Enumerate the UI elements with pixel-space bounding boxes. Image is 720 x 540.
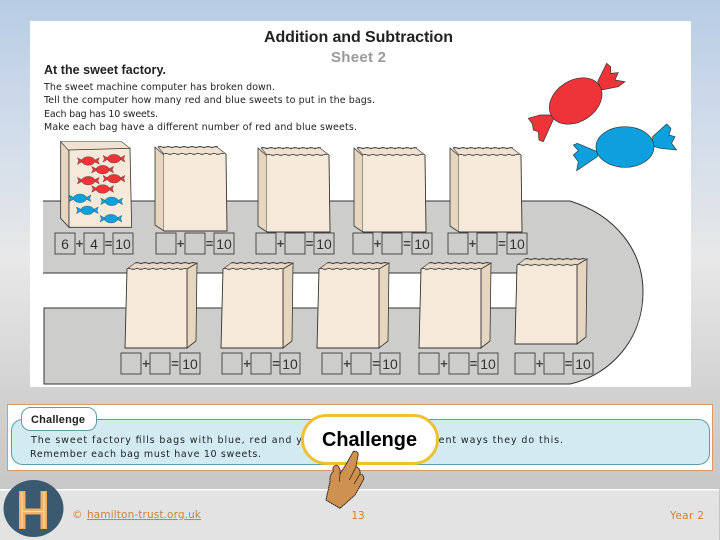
equation 4: = bbox=[403, 236, 411, 251]
equation 7: + bbox=[243, 356, 251, 371]
instructions text: The sweet machine computer has broken down. bbox=[43, 82, 275, 93]
challenge text: Remember each bag must have 10 sweets. bbox=[30, 449, 261, 460]
challenge text bbox=[30, 435, 563, 460]
equation: 6 + 4 = 10: 10 bbox=[115, 236, 131, 252]
equation 6: = bbox=[171, 356, 179, 371]
paper bag 4 bbox=[354, 147, 426, 232]
bag with example sweets bbox=[61, 142, 132, 227]
callout: challenge bubble: Challenge bbox=[322, 428, 417, 451]
equation 5: 10 bbox=[509, 236, 525, 252]
equation: 6 + 4 = 10 bbox=[55, 233, 133, 254]
instructions text: Make each bag have a different number of red and blue sweets. bbox=[44, 122, 357, 133]
page number: 13 bbox=[351, 510, 365, 522]
footer copyright link: © bbox=[72, 509, 82, 521]
paper bag 2 bbox=[155, 146, 227, 231]
equation 2: 10 bbox=[216, 236, 232, 252]
equation 5 bbox=[448, 233, 527, 254]
instructions text: Tell the computer how many red and blue sweets to put in the bags. bbox=[43, 95, 375, 106]
equation 3: 10 bbox=[316, 236, 332, 252]
equation 10: + bbox=[536, 356, 544, 371]
equation 4: + bbox=[374, 236, 382, 251]
equation 7 bbox=[222, 353, 300, 374]
subtitle: Sheet 2 bbox=[331, 49, 386, 66]
challenge text: The sweet factory fills bags with blue, red and yellow sweets. Find different ways they do this. bbox=[30, 435, 563, 446]
equation 9 bbox=[419, 353, 498, 374]
challenge text box bbox=[12, 420, 710, 464]
equation 7: 10 bbox=[282, 356, 298, 372]
equation 10 bbox=[515, 353, 593, 374]
equation 4 bbox=[353, 233, 432, 254]
paper bag 9 bbox=[419, 262, 491, 348]
equation 9: = bbox=[470, 356, 478, 371]
year label: Year 2 bbox=[669, 510, 704, 522]
heading: at the sweet factory: At the sweet factory. bbox=[44, 63, 166, 77]
paper bag 5 bbox=[450, 147, 522, 232]
challenge tab bbox=[22, 408, 96, 430]
equation 8: + bbox=[343, 356, 351, 371]
equation 3: = bbox=[306, 236, 314, 251]
equation 2: = bbox=[206, 236, 214, 251]
paper bag 10 bbox=[515, 258, 587, 344]
equation 8: = bbox=[372, 356, 380, 371]
equation 2: + bbox=[177, 236, 185, 251]
paper bag 3 bbox=[258, 147, 330, 232]
equation 3 bbox=[256, 233, 334, 254]
icon: Hamilton Trust logo bbox=[4, 480, 64, 537]
equation 6 bbox=[121, 353, 200, 374]
equation 10: = bbox=[565, 356, 573, 371]
conveyor belt bbox=[43, 201, 643, 384]
icon: large blue sweet bbox=[573, 124, 677, 171]
equation 4: 10 bbox=[414, 236, 430, 252]
instructions text: Each bag has 10 sweets. bbox=[44, 109, 158, 120]
equation 6: + bbox=[142, 356, 150, 371]
equation 7: = bbox=[272, 356, 280, 371]
panel: worksheet bbox=[30, 21, 691, 387]
equation: 6 + 4 = 10: + bbox=[76, 236, 84, 251]
equation 6: 10 bbox=[182, 356, 198, 372]
footer bar bbox=[0, 489, 719, 540]
equation 5: = bbox=[498, 236, 506, 251]
equation: 6 + 4 = 10: 4 bbox=[90, 236, 98, 252]
footer copyright link: hamilton-trust.org.uk bbox=[87, 509, 202, 521]
equation 9: + bbox=[440, 356, 448, 371]
equation 2 bbox=[156, 233, 234, 254]
equation 3: + bbox=[277, 236, 285, 251]
instructions text bbox=[43, 82, 375, 133]
challenge tab: Challenge bbox=[31, 414, 85, 426]
paper bag 6 bbox=[125, 262, 197, 348]
equation: 6 + 4 = 10: = bbox=[105, 236, 113, 251]
equation 8: 10 bbox=[382, 356, 398, 372]
equation 9: 10 bbox=[480, 356, 496, 372]
panel: challenge bbox=[8, 404, 712, 470]
title: Addition and Subtraction bbox=[264, 29, 453, 46]
equation 8 bbox=[322, 353, 400, 374]
equation: 6 + 4 = 10: 6 bbox=[61, 236, 69, 252]
equation 10: 10 bbox=[575, 356, 591, 372]
icon: pointing hand bbox=[326, 451, 364, 508]
equation 5: + bbox=[469, 236, 477, 251]
paper bag 8 bbox=[317, 262, 389, 348]
icon: large red sweet bbox=[528, 63, 625, 142]
paper bag 7 bbox=[221, 262, 293, 348]
callout: challenge bubble bbox=[302, 416, 438, 464]
